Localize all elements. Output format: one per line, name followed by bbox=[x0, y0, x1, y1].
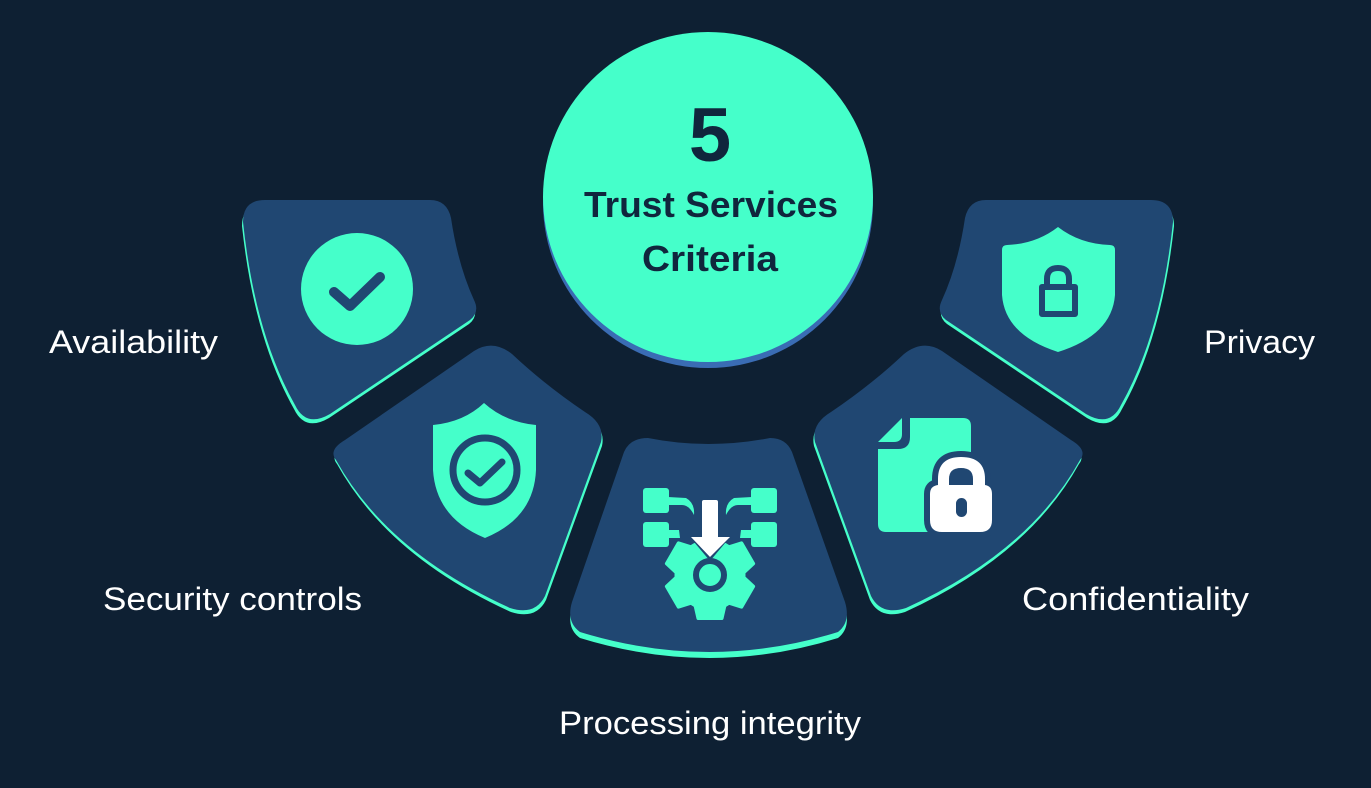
label: availability: Availability bbox=[49, 324, 218, 360]
label: confidentiality: Confidentiality bbox=[1022, 581, 1249, 617]
heading line 2: Criteria bbox=[642, 238, 779, 279]
icon: shield with lock bbox=[1002, 227, 1115, 352]
heading number: 5 bbox=[689, 93, 731, 178]
icon: shield with check bbox=[433, 403, 536, 538]
panel: availability bbox=[242, 200, 476, 423]
icon: gear with flow and arrow bbox=[643, 488, 777, 618]
label: privacy: Privacy bbox=[1204, 324, 1315, 360]
panel: privacy bbox=[940, 200, 1174, 423]
panel: confidentiality bbox=[813, 346, 1083, 614]
label: security controls: Security controls bbox=[103, 581, 362, 617]
panel: security controls bbox=[333, 346, 603, 614]
panel: processing integrity bbox=[570, 438, 847, 658]
icon: document with padlock bbox=[878, 418, 992, 532]
icon: check circle bbox=[301, 233, 413, 345]
heading line 1: Trust Services bbox=[584, 184, 838, 225]
label: processing integrity: Processing integrity bbox=[559, 705, 861, 741]
center circle: 5 Trust Services Criteria bbox=[543, 32, 873, 368]
